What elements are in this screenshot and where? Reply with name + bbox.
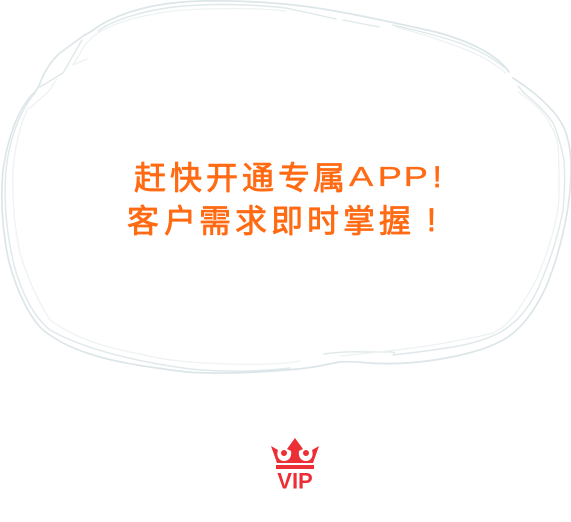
hand-drawn speech bubble outline — [2, 1, 571, 373]
headline line 2: 客户需求即时掌握 — [127, 203, 411, 239]
headline text — [127, 160, 441, 239]
headline line 1: 赶快开通专属 — [134, 160, 345, 196]
crown band — [276, 465, 314, 469]
crown right jewel — [303, 450, 309, 456]
crown — [271, 438, 319, 463]
headline exclamation 2: ! — [427, 202, 436, 238]
headline APP letters: APP — [349, 161, 428, 192]
crown left jewel — [281, 450, 287, 456]
icon: VIP crown — [271, 438, 319, 494]
VIP label: VIP — [277, 468, 313, 494]
headline exclamation 1: ! — [433, 161, 441, 194]
